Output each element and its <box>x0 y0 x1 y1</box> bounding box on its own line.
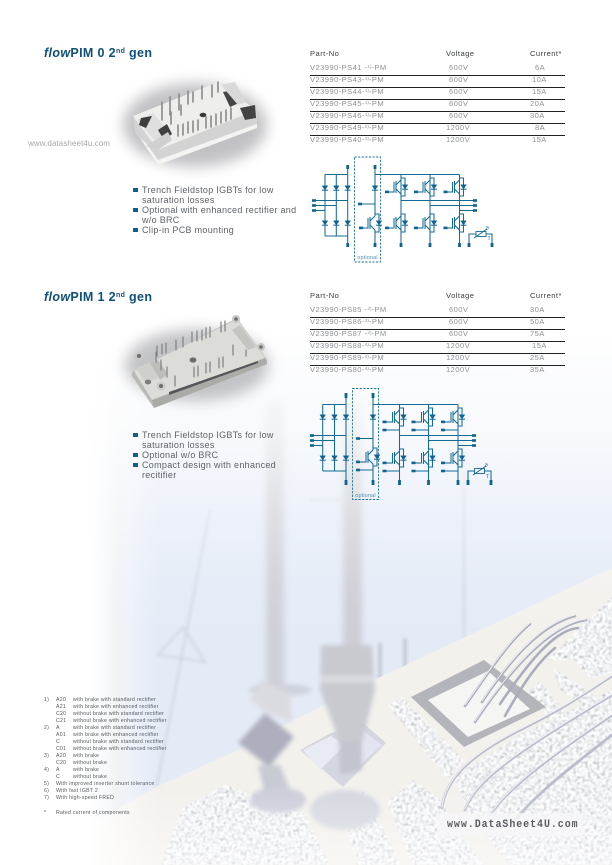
bullet list: flowPIM 1 features: saturation losses <box>142 440 215 450</box>
footnotes: 6) <box>44 788 49 794</box>
footnotes: A21 <box>56 704 66 710</box>
footnotes: A <box>56 767 60 773</box>
footnote 2 C01 <box>56 746 167 752</box>
footnotes: with brake with standard rectifier <box>73 697 156 703</box>
row PS86: 50A <box>530 317 545 326</box>
footnotes: with brake with standard rectifier <box>73 725 156 731</box>
row PS43: 10A <box>532 75 547 84</box>
row PS41: 600V <box>449 63 468 72</box>
row PS45: 600V <box>449 99 468 108</box>
footnote 1 C20 <box>56 711 164 717</box>
footnote 1 A20 <box>44 697 156 703</box>
footnote 5 <box>44 781 154 787</box>
row PS49: 1200V <box>446 123 470 132</box>
bullet list: flowPIM 0 features <box>133 185 296 235</box>
bullet list: flowPIM 0 features: Trench Fieldstop IGBTs for low <box>142 185 274 195</box>
solder post heads <box>238 645 380 830</box>
board <box>60 568 612 865</box>
watermark badge: bottom right url <box>437 813 583 836</box>
row PS40: 15A <box>532 135 547 144</box>
NTC thermistor: T <box>488 236 491 242</box>
footnotes: 5) <box>44 781 49 787</box>
footnotes: without brake with standard rectifier <box>73 739 164 745</box>
row PS89: V23990-PS89-4)-PM <box>310 353 384 362</box>
bullet list: flowPIM 1 features: Compact design with enhanced <box>142 460 276 470</box>
NTC thermistor: T <box>486 474 489 480</box>
row PS88 <box>310 340 565 354</box>
footnote 6 <box>43 788 45 795</box>
footnotes: with brake with enhanced rectifier <box>73 704 159 710</box>
row PS40: V23990-PS40-2)-PM <box>310 135 384 144</box>
row PS49 <box>310 122 565 136</box>
row PS45 <box>310 98 565 112</box>
bonded die pad <box>411 660 546 747</box>
footnotes: 4) <box>44 767 49 773</box>
brake chopper <box>358 165 382 247</box>
footnotes: without brake with enhanced rectifier <box>73 718 167 724</box>
footnote 3 A20 <box>44 753 99 759</box>
footnotes: without brake with standard rectifier <box>73 711 164 717</box>
row PS86: 600V <box>449 317 468 326</box>
footnotes: with brake <box>73 767 99 773</box>
row PS49: 8A <box>535 123 545 132</box>
row PS88: V23990-PS88-4)-PM <box>310 341 384 350</box>
bullet list: flowPIM 1 features: Trench Fieldstop IGBTs for low <box>142 430 274 440</box>
row PS49: V23990-PS49-2)-PM <box>310 123 384 132</box>
row PS41: V23990-PS41 -1)-PM <box>310 63 387 72</box>
row PS87: 600V <box>449 329 468 338</box>
row PS44 <box>310 86 565 100</box>
footnote 7 <box>43 795 45 802</box>
row PS86: V23990-PS86-3)-PM <box>310 317 384 326</box>
bullet list: flowPIM 1 features: Optional w/o BRC <box>142 450 218 460</box>
row PS45: 20A <box>530 99 545 108</box>
pad under solder post <box>300 723 386 787</box>
table header: Current* <box>530 49 562 58</box>
silver traces <box>160 597 612 865</box>
footnotes: C <box>56 739 60 745</box>
row PS89: 25A <box>530 353 545 362</box>
footnote 3 C20 <box>56 760 107 766</box>
circuit diagram: flowPIM 1 <box>310 388 492 500</box>
circuit diagram: flowPIM 0 <box>312 156 494 262</box>
footnotes: with brake with enhanced rectifier <box>73 732 159 738</box>
row PS46: 30A <box>530 111 545 120</box>
row PS88: 15A <box>532 341 547 350</box>
footnote 1 A21 <box>56 704 159 710</box>
bond wires <box>442 615 612 820</box>
rectifier bridge <box>310 393 349 485</box>
row PS44: 15A <box>532 87 547 96</box>
table header: Part-No <box>310 291 339 300</box>
footnotes: 7) <box>44 795 49 801</box>
dashed optional box <box>352 388 378 500</box>
table header: Voltage <box>446 49 474 58</box>
row PS85: 30A <box>530 305 545 314</box>
dashed optional box <box>354 157 380 262</box>
NTC thermistor <box>467 463 492 485</box>
bullet list: flowPIM 0 features: Clip-in PCB mounting <box>142 225 234 235</box>
row PS40 <box>310 135 547 144</box>
rectifier bridge <box>312 165 351 247</box>
footnote 2 A01 <box>56 732 159 738</box>
row PS80: V23990-PS80-4)-PM <box>310 365 384 374</box>
footnotes: C21 <box>56 718 66 724</box>
table header: Voltage <box>446 291 474 300</box>
footnote 4 A <box>44 767 99 773</box>
row PS44: V23990-PS44-1)-PM <box>310 87 384 96</box>
footnotes: C01 <box>56 746 66 752</box>
footnotes: with brake <box>73 753 99 759</box>
footnotes: C <box>56 774 60 780</box>
NTC thermistor <box>468 226 493 247</box>
footnotes: With improved inverter shunt tolerance <box>56 781 154 787</box>
bullet list: flowPIM 0 features: w/o BRC <box>142 215 180 225</box>
NTC thermistor: ϑ <box>486 226 489 232</box>
footnotes: C20 <box>56 760 66 766</box>
dashed optional box: optional <box>357 255 378 261</box>
table header <box>310 49 562 58</box>
watermark text: www.DataSheet4U.com <box>447 819 579 831</box>
footnotes: without brake <box>73 760 107 766</box>
row PS85 <box>310 304 565 318</box>
dashed optional box: optional <box>355 493 376 499</box>
footnotes: 2) <box>44 725 49 731</box>
footnotes: 3) <box>44 753 49 759</box>
footnote 2 A <box>44 725 156 731</box>
title: flowPIM 1: flowPIM 1 2nd gen <box>44 290 152 304</box>
NTC thermistor: ϑ <box>485 463 488 469</box>
footnotes: A01 <box>56 732 66 738</box>
brake chopper <box>356 393 380 485</box>
row PS40: 1200V <box>446 135 470 144</box>
row PS45: V23990-PS45-1)-PM <box>310 99 384 108</box>
footnotes: * <box>44 810 46 816</box>
bullet list: flowPIM 0 features: saturation losses <box>142 195 215 205</box>
row PS41: 6A <box>535 63 545 72</box>
footnotes: A20 <box>56 753 66 759</box>
footnotes: A <box>56 725 60 731</box>
row PS46: V23990-PS46-1)-PM <box>310 111 384 120</box>
row PS43: V23990-PS43-1)-PM <box>310 75 384 84</box>
bullet list: flowPIM 1 features <box>133 430 276 480</box>
inverter bridge <box>375 174 477 247</box>
watermark: datasheet url: www.datasheet4u.com <box>28 139 110 148</box>
row PS88: 1200V <box>446 341 470 350</box>
footnote 2 C <box>56 739 164 745</box>
row PS85: 600V <box>449 305 468 314</box>
product photo: flowPIM 1 module <box>119 315 275 408</box>
row PS80 <box>310 365 545 374</box>
footnotes <box>44 697 167 816</box>
footnotes: C20 <box>56 711 66 717</box>
footnotes: With high-speed FRED <box>56 795 114 801</box>
row PS80: 35A <box>530 365 545 374</box>
row PS46 <box>310 110 565 124</box>
footnotes: without brake with enhanced rectifier <box>73 746 167 752</box>
row PS44: 600V <box>449 87 468 96</box>
product photo: flowPIM 0 module <box>116 76 274 174</box>
footnotes: without brake <box>73 774 107 780</box>
title: flowPIM 0: flowPIM 0 2nd gen <box>44 46 152 60</box>
table header: Part-No <box>310 49 339 58</box>
bullet list: flowPIM 1 features: recitifier <box>142 470 177 480</box>
table header: Current* <box>530 291 562 300</box>
row PS86 <box>310 316 565 330</box>
footnotes: Rated current of components <box>56 810 130 816</box>
bullet list: flowPIM 0 features: Optional with enhanced rectifier and <box>142 205 296 215</box>
row PS87: 75A <box>530 329 545 338</box>
row PS46: 600V <box>449 111 468 120</box>
row PS89 <box>310 352 565 366</box>
footnote 4 C <box>56 774 107 780</box>
table header <box>310 291 562 300</box>
footnotes: 1) <box>44 697 49 703</box>
footnote asterisk <box>43 810 45 817</box>
row PS43: 600V <box>449 75 468 84</box>
table: flowPIM 0 part numbers <box>310 49 565 144</box>
footnote 1 C21 <box>56 718 167 724</box>
row PS41 <box>310 62 565 76</box>
row PS80: 1200V <box>446 365 470 374</box>
table: flowPIM 1 part numbers <box>310 291 565 374</box>
row PS43 <box>310 74 565 88</box>
footnotes: A20 <box>56 697 66 703</box>
row PS85: V23990-PS85 -3)-PM <box>310 305 387 314</box>
row PS87: V23990-PS87 -3)-PM <box>310 329 387 338</box>
row PS87 <box>310 328 565 342</box>
inverter bridge <box>373 404 476 485</box>
footnotes: With fast IGBT 2 <box>56 788 98 794</box>
row PS89: 1200V <box>446 353 470 362</box>
